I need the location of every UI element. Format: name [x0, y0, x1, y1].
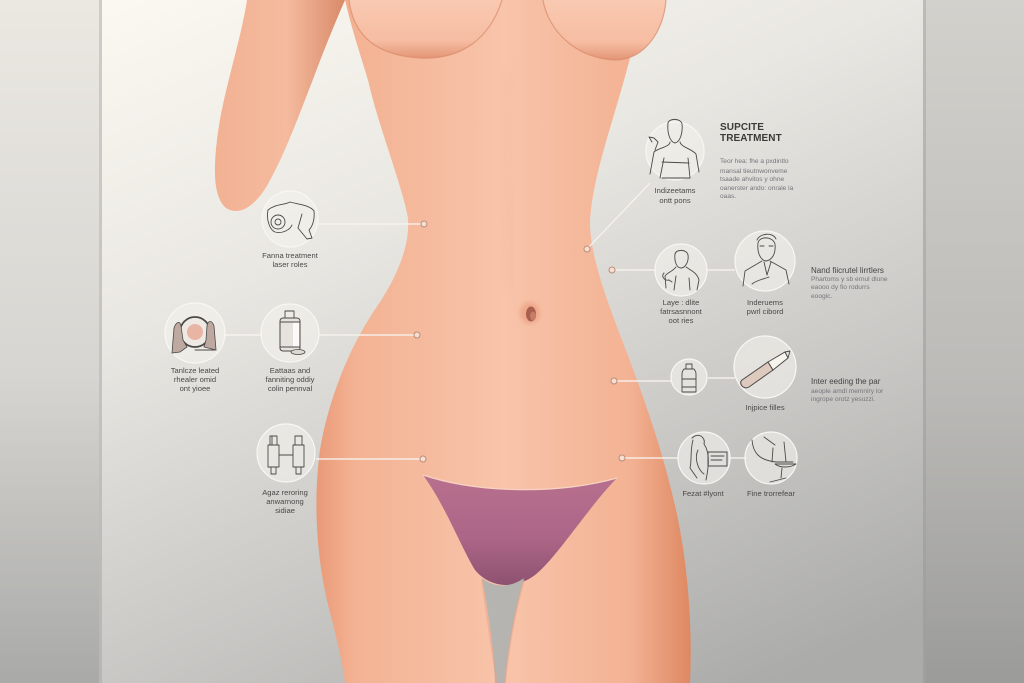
- icon: doctor portrait: [735, 231, 795, 291]
- label: face treatment: [262, 251, 319, 269]
- icon: hands holding dish: [165, 303, 225, 363]
- description: treatment: tsaade ahvitos y ohne: [720, 176, 784, 183]
- description: hand treated: Phartoms y sb ernul dlune: [811, 276, 888, 283]
- heading: treatment title: SUPCITE: [720, 122, 764, 133]
- description: hand treated: eoogic.: [811, 293, 832, 300]
- label: fat removal: colin pennval: [268, 384, 312, 393]
- description: treatment: mansal tieutnwonveme: [720, 168, 788, 175]
- heading: treatment title: TREATMENT: [720, 133, 782, 144]
- label: indications second: Inderuems: [747, 298, 783, 307]
- label: layer: [660, 298, 703, 325]
- label: indications second: [747, 298, 783, 316]
- description: injection: [811, 377, 884, 403]
- label: indications second: pwrl cibord: [747, 307, 783, 316]
- label: free transfer: Fine trorrefear: [747, 489, 796, 498]
- description: injection: Inter eeding the par: [811, 377, 881, 386]
- label: indications: Indizeetams: [655, 186, 696, 195]
- underwear: [423, 475, 617, 585]
- label: fat removal: fanniting oddiy: [266, 375, 315, 384]
- connector lines and markers: [225, 183, 746, 462]
- label: layer: Laye : dlite: [663, 298, 699, 307]
- heading: treatment title: [720, 122, 782, 144]
- label: topical treatment: Tanlcze leated: [171, 366, 219, 375]
- label: layer: oot ries: [669, 316, 694, 325]
- label: injection fillers: Injpice filles: [745, 403, 785, 412]
- description: treatment: oaas.: [720, 193, 736, 200]
- description: injection: ingrope orotz yesuzzi.: [811, 396, 875, 403]
- icon: man with raised arm: [646, 119, 704, 180]
- description: hand treated: [811, 266, 888, 300]
- label: indications: ontt pons: [659, 196, 691, 205]
- illustrated arm: [215, 0, 345, 211]
- description: treatment: oanerster ando: onrale la: [720, 185, 794, 192]
- label: topical treatment: ont yioee: [180, 384, 210, 393]
- icon: treatment session: [745, 432, 797, 484]
- navel: [520, 302, 540, 324]
- abdomen shading: [503, 70, 512, 290]
- icon: injector pen: [734, 336, 796, 398]
- icon: twin injectors: [257, 424, 315, 482]
- label: age reversing: anwarnong: [266, 497, 304, 506]
- icon: person portrait small: [655, 244, 707, 296]
- description: treatment: [720, 158, 794, 200]
- label: layer: fatrsasnnont: [660, 307, 703, 316]
- label: age reversing: Agaz reroring: [262, 488, 308, 497]
- label: topical treatment: [171, 366, 219, 393]
- label: face treatment: Fanna treatment: [262, 251, 319, 260]
- label: topical treatment: rhealer omid: [174, 375, 216, 384]
- description: injection: aeople amdl memnlry lor: [811, 388, 884, 395]
- icon: bottle: [261, 304, 319, 362]
- label: indications: [655, 186, 696, 205]
- icon: side-view figure: [678, 432, 730, 484]
- description: hand treated: eaooo dy fio rodurrs: [811, 284, 870, 291]
- label: face treatment: laser roles: [272, 260, 308, 269]
- icon: small vial: [671, 359, 707, 395]
- icon: face treatment device: [262, 191, 318, 247]
- illustrated torso and legs: [316, 0, 691, 683]
- gap between thighs: [482, 578, 524, 683]
- label: age reversing: [262, 488, 308, 515]
- description: treatment: Teor hea: fhe a pxdintlo: [720, 158, 789, 165]
- label: fat removal: [266, 366, 315, 393]
- label: fat removal: Eattaas and: [270, 366, 310, 375]
- chest underside shading: [349, 0, 666, 60]
- label: age reversing: sidiae: [275, 506, 295, 515]
- label: fast effect: Fezat #lyont: [682, 489, 725, 498]
- description: hand treated: Nand fiicrutel lirrtlers: [811, 266, 884, 275]
